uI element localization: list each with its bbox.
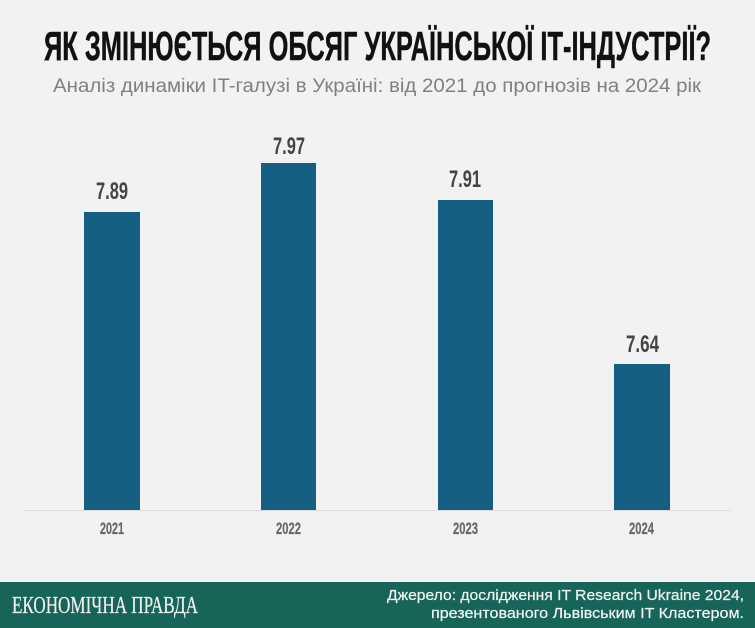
source note (387, 587, 744, 622)
bar: 2023: 7.91 (449, 166, 481, 193)
source note: Джерело: дослідження IT Research Ukraine 2024, (387, 587, 744, 604)
bar: 2021 (84, 178, 140, 538)
bar: 2022: 2022 (276, 519, 301, 538)
bar: 2024: 7.64 (626, 331, 659, 358)
bar: 2024 (614, 331, 670, 538)
subtitle: Аналіз динаміки IT-галузі в Україні: від 2021 до прогнозів на 2024 рік (53, 76, 702, 97)
bar: 2024: 2024 (629, 519, 654, 538)
bar: 2022: 7.97 (273, 133, 305, 160)
bar: 2021: 2021 (100, 519, 124, 538)
bar: 2022 (261, 133, 316, 538)
source note: презентованого Львівським IT Кластером. (431, 605, 744, 622)
logo: Економічна правда: ЕКОНОМІЧНА ПРАВДА (12, 593, 198, 619)
footer band (0, 582, 755, 628)
bar chart (24, 133, 731, 538)
bar: 2023 (438, 166, 493, 538)
bar: 2023: 2023 (453, 519, 478, 538)
bar: 2021: 7.89 (96, 178, 128, 205)
